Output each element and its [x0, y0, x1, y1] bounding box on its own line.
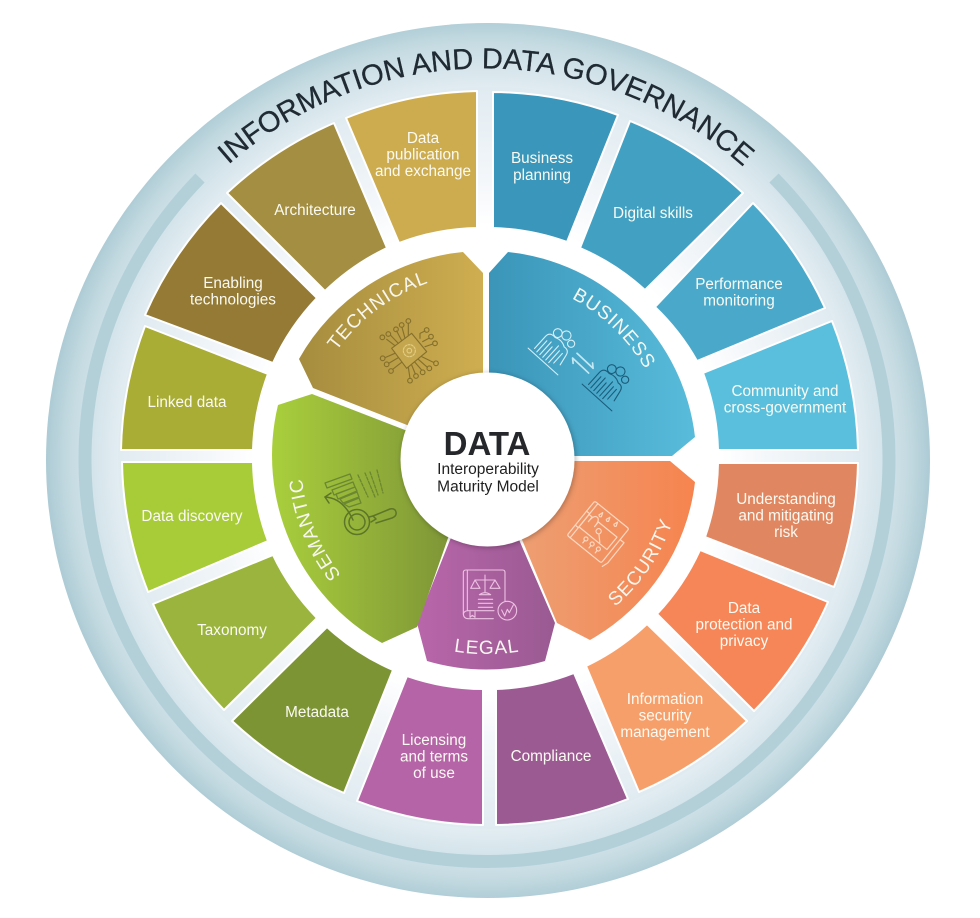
icon: exchange arrows — [570, 351, 595, 376]
panel: legal segments — [357, 673, 628, 825]
panel: technical segments — [145, 91, 477, 363]
subtitle: Interoperability — [437, 461, 539, 478]
title: Information and Data Governance: INFORMATION AND DATA GOVERNANCE — [217, 48, 756, 166]
segment: Performance monitoring: Performance — [695, 276, 783, 293]
subtitle: Maturity Model — [437, 478, 539, 496]
segment: Data publication and exchange: publication — [386, 146, 460, 164]
segment: Community and cross-government — [703, 321, 858, 450]
segment: Taxonomy: Taxonomy — [197, 622, 267, 639]
segment: Compliance: Compliance — [511, 748, 591, 765]
segment: Data publication and exchange — [346, 91, 477, 243]
segment: Community and cross-government: Community and — [731, 383, 839, 400]
segment: Understanding and mitigating risk: Understanding — [736, 491, 836, 508]
heading: DATA: DATA — [444, 425, 530, 462]
segment: Digital skills: Digital skills — [613, 205, 693, 222]
icon: search chart — [325, 470, 396, 534]
panel: legal wedge — [418, 538, 555, 670]
segment: Compliance — [496, 673, 628, 825]
segment: Digital skills — [580, 121, 743, 290]
panel: semantic wedge — [272, 394, 448, 643]
segment: Licensing and terms of use: Licensing — [402, 732, 466, 749]
segment: Architecture — [227, 123, 387, 291]
segment: Data protection and privacy: Data — [728, 600, 760, 617]
segment: Data protection and privacy: privacy — [720, 633, 769, 650]
segment: Licensing and terms of use — [357, 676, 483, 825]
segment: Data protection and privacy — [657, 550, 828, 711]
segment: Data publication and exchange: and exchange — [375, 163, 471, 180]
icon: circuit chip — [380, 319, 438, 383]
segment: Taxonomy — [153, 555, 317, 710]
magnifier with arrow — [325, 493, 396, 534]
segment: Performance monitoring — [655, 203, 825, 361]
segment: Business planning — [493, 92, 618, 242]
panel: semantic segments — [121, 326, 393, 793]
segment: Data protection and privacy: protection and — [696, 616, 792, 634]
segment: Data discovery — [122, 462, 268, 592]
segment: Licensing and terms of use: and terms — [400, 748, 468, 766]
panel: security wedge — [522, 461, 695, 640]
segment: Architecture: Architecture — [274, 202, 356, 219]
panel: business wedge — [489, 252, 695, 456]
segment: Performance monitoring: monitoring — [703, 292, 775, 310]
segment: Understanding and mitigating risk: risk — [774, 524, 798, 541]
segment: Information security management — [586, 624, 747, 792]
segment: Business planning: planning — [513, 167, 571, 184]
segment: Information security management: management — [620, 724, 710, 741]
icon: secure tablet — [566, 501, 633, 568]
segment: Data publication and exchange: Data — [407, 130, 439, 147]
segment: Enabling technologies: technologies — [190, 292, 276, 308]
heading: Security: SECURITY — [608, 518, 670, 605]
segment: Licensing and terms of use: of use — [413, 765, 455, 782]
segment: Metadata — [232, 627, 393, 793]
panel: security segments — [586, 463, 858, 792]
segment: Linked data: Linked data — [147, 394, 227, 411]
segment: Enabling technologies: Enabling — [203, 275, 263, 292]
heading: Business: BUSINESS — [573, 288, 654, 367]
segment: Understanding and mitigating risk: and mitigating — [738, 508, 834, 524]
panel: business segments — [493, 92, 858, 450]
heading: Semantic: SEMANTIC — [290, 480, 340, 580]
segment: Linked data — [121, 326, 268, 450]
heading: Legal: LEGAL — [455, 638, 518, 654]
chart bars — [325, 470, 383, 507]
icon: dark people group — [582, 355, 638, 411]
segment: Community and cross-government: cross-government — [724, 400, 847, 416]
icon: light people group — [528, 319, 584, 375]
segment: Data discovery: Data discovery — [141, 508, 243, 525]
heading: Technical: TECHNICAL — [326, 273, 428, 348]
segment: Business planning: Business — [511, 150, 573, 167]
segment: Enabling technologies — [145, 203, 317, 363]
center circle: Data Interoperability Maturity Model — [400, 372, 574, 546]
panel: technical wedge — [299, 252, 483, 426]
icon: law book with scales — [463, 570, 517, 620]
segment: Information security management: Information — [627, 691, 703, 708]
segment: Metadata: Metadata — [285, 704, 349, 721]
segment: Information security management: security — [639, 708, 692, 724]
segment: Understanding and mitigating risk — [705, 463, 858, 587]
